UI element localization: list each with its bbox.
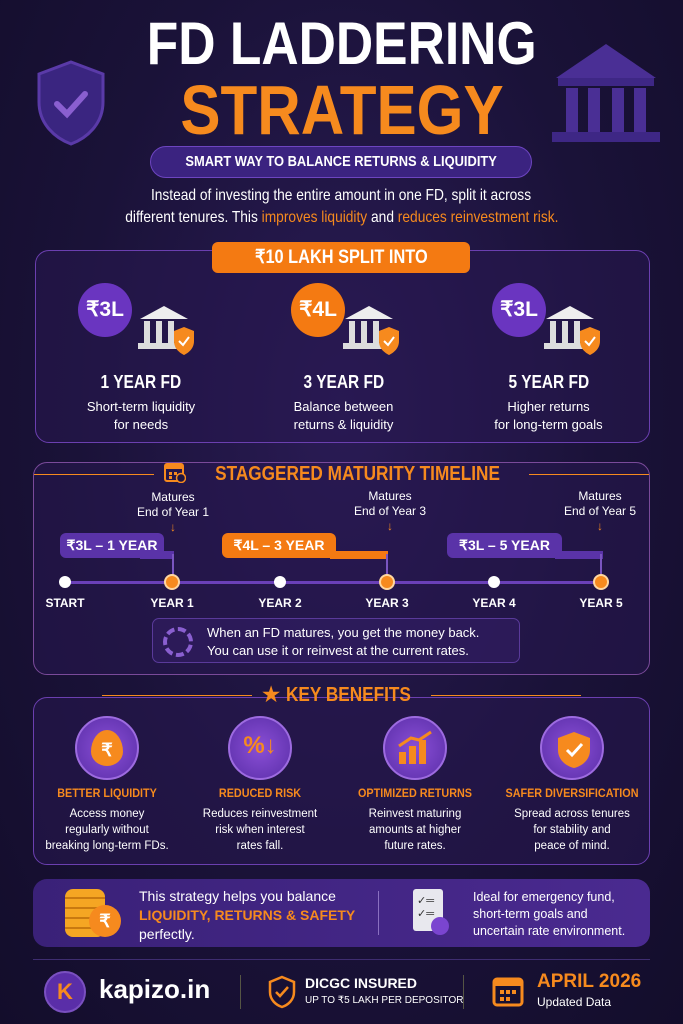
column: 3 year: 3 YEAR FD (303, 372, 384, 392)
title (147, 10, 536, 149)
benefit icons (75, 716, 139, 780)
panel: benefits (33, 697, 650, 865)
summary card (33, 879, 650, 947)
timeline chart: Matures (368, 489, 412, 503)
footer: Updated Data (537, 995, 611, 1009)
intro text: Instead of investing the entire amount in one FD, split it across (151, 187, 532, 204)
timeline chart (60, 489, 636, 584)
text: YEAR 2 (258, 596, 302, 610)
timeline chart: ↓ (387, 519, 393, 533)
column: 1 year: Short-term liquidity (87, 399, 195, 414)
text: REDUCED RISK (219, 786, 301, 800)
text: Reduces reinvestment (203, 808, 317, 820)
footer (44, 971, 641, 1013)
intro text: different tenures. This improves liquidity and reduces reinvestment risk. (125, 209, 558, 226)
column: 3 year (291, 283, 399, 432)
panel: timeline (33, 462, 650, 675)
summary card: Ideal for emergency fund, (473, 890, 615, 904)
summary card: LIQUIDITY, RETURNS & SAFETY (139, 907, 355, 923)
title: STRATEGY (180, 71, 503, 149)
subtitle pill (150, 146, 532, 178)
summary card: short-term goals and (473, 907, 588, 921)
timeline chart: ↓ (597, 519, 603, 533)
summary card: uncertain rate environment. (473, 924, 625, 938)
column: 1 year (78, 283, 196, 432)
column: 1 year: for needs (114, 417, 168, 432)
icon: coins (65, 889, 105, 937)
intro text (125, 187, 558, 226)
text: YEAR 5 (579, 596, 623, 610)
text: for stability and (533, 824, 611, 836)
column: 5 year: for long-term goals (494, 417, 603, 432)
text: future rates. (384, 840, 446, 852)
column: 3 year: ₹4L (299, 298, 337, 321)
text: YEAR 4 (472, 596, 516, 610)
benefits heading: KEY BENEFITS (286, 684, 411, 706)
footer: K (57, 979, 73, 1004)
text: peace of mind. (534, 840, 610, 852)
note box (152, 618, 520, 663)
text: rates fall. (237, 840, 283, 852)
timeline chart: Matures (578, 489, 622, 503)
footer: UP TO ₹5 LAKH PER DEPOSITOR (305, 995, 463, 1006)
timeline chart: ↓ (170, 520, 176, 534)
banner: 10 lakh: ₹10 LAKH SPLIT INTO (255, 247, 427, 268)
column: 3 year: Balance between (294, 399, 393, 414)
text: %↓ (243, 732, 277, 759)
benefit texts: BETTER LIQUIDITY (57, 786, 157, 800)
footer: kapizo.in (99, 974, 210, 1004)
timeline heading (34, 463, 649, 485)
text: SAFER DIVERSIFICATION (505, 786, 639, 800)
summary card: This strategy helps you balance (139, 888, 336, 904)
column: 5 year (492, 283, 603, 432)
text: START (45, 596, 85, 610)
icon: clipboard: ✓═ (417, 895, 434, 907)
benefit texts: regularly without (65, 824, 149, 836)
summary card: ₹ (99, 911, 111, 931)
text: amounts at higher (369, 824, 461, 836)
note box: When an FD matures, you get the money back. (207, 625, 479, 640)
benefit texts: breaking long-term FDs. (45, 840, 169, 852)
summary card: perfectly. (139, 926, 195, 942)
banner: 10 lakh (212, 242, 470, 273)
footer: APRIL 2026 (537, 971, 641, 992)
benefits heading (102, 684, 581, 706)
column: 5 year: 5 YEAR FD (508, 372, 589, 392)
icon: bank (552, 44, 660, 142)
icon: shield (38, 60, 104, 146)
text: risk when interest (215, 824, 305, 836)
icon: clipboard: ✓═ (417, 908, 434, 920)
timeline chart: End of Year 5 (564, 504, 636, 518)
footer: DICGC INSURED (305, 975, 417, 991)
column: 5 year: Higher returns (507, 399, 590, 414)
column: 3 year: returns & liquidity (294, 417, 393, 432)
column: 1 year: ₹3L (86, 298, 124, 321)
text: Reinvest maturing (369, 808, 461, 820)
timeline heading: STAGGERED MATURITY TIMELINE (215, 463, 500, 485)
benefit icons: ₹ (101, 740, 113, 760)
column: 5 year: ₹3L (500, 298, 538, 321)
timeline chart: ₹3L – 5 YEAR (459, 537, 550, 553)
timeline chart: ₹4L – 3 YEAR (234, 537, 324, 553)
benefit texts: Access money (70, 808, 144, 820)
column: 1 year: 1 YEAR FD (101, 372, 181, 392)
panel: split (35, 250, 650, 443)
benefits heading: ★ (262, 684, 280, 706)
subtitle pill: SMART WAY TO BALANCE RETURNS & LIQUIDITY (185, 153, 497, 170)
text: YEAR 3 (365, 596, 409, 610)
text: OPTIMIZED RETURNS (358, 786, 472, 800)
benefit texts (45, 786, 169, 852)
timeline chart: Matures (151, 490, 195, 504)
timeline chart: End of Year 3 (354, 504, 426, 518)
timeline chart: End of Year 1 (137, 505, 209, 519)
icon: clipboard (413, 889, 443, 931)
title: FD LADDERING (147, 10, 536, 77)
timeline chart: ₹3L – 1 YEAR (67, 537, 157, 553)
note box: You can use it or reinvest at the current rates. (207, 643, 469, 658)
text: Spread across tenures (514, 808, 630, 820)
text: YEAR 1 (150, 596, 194, 610)
